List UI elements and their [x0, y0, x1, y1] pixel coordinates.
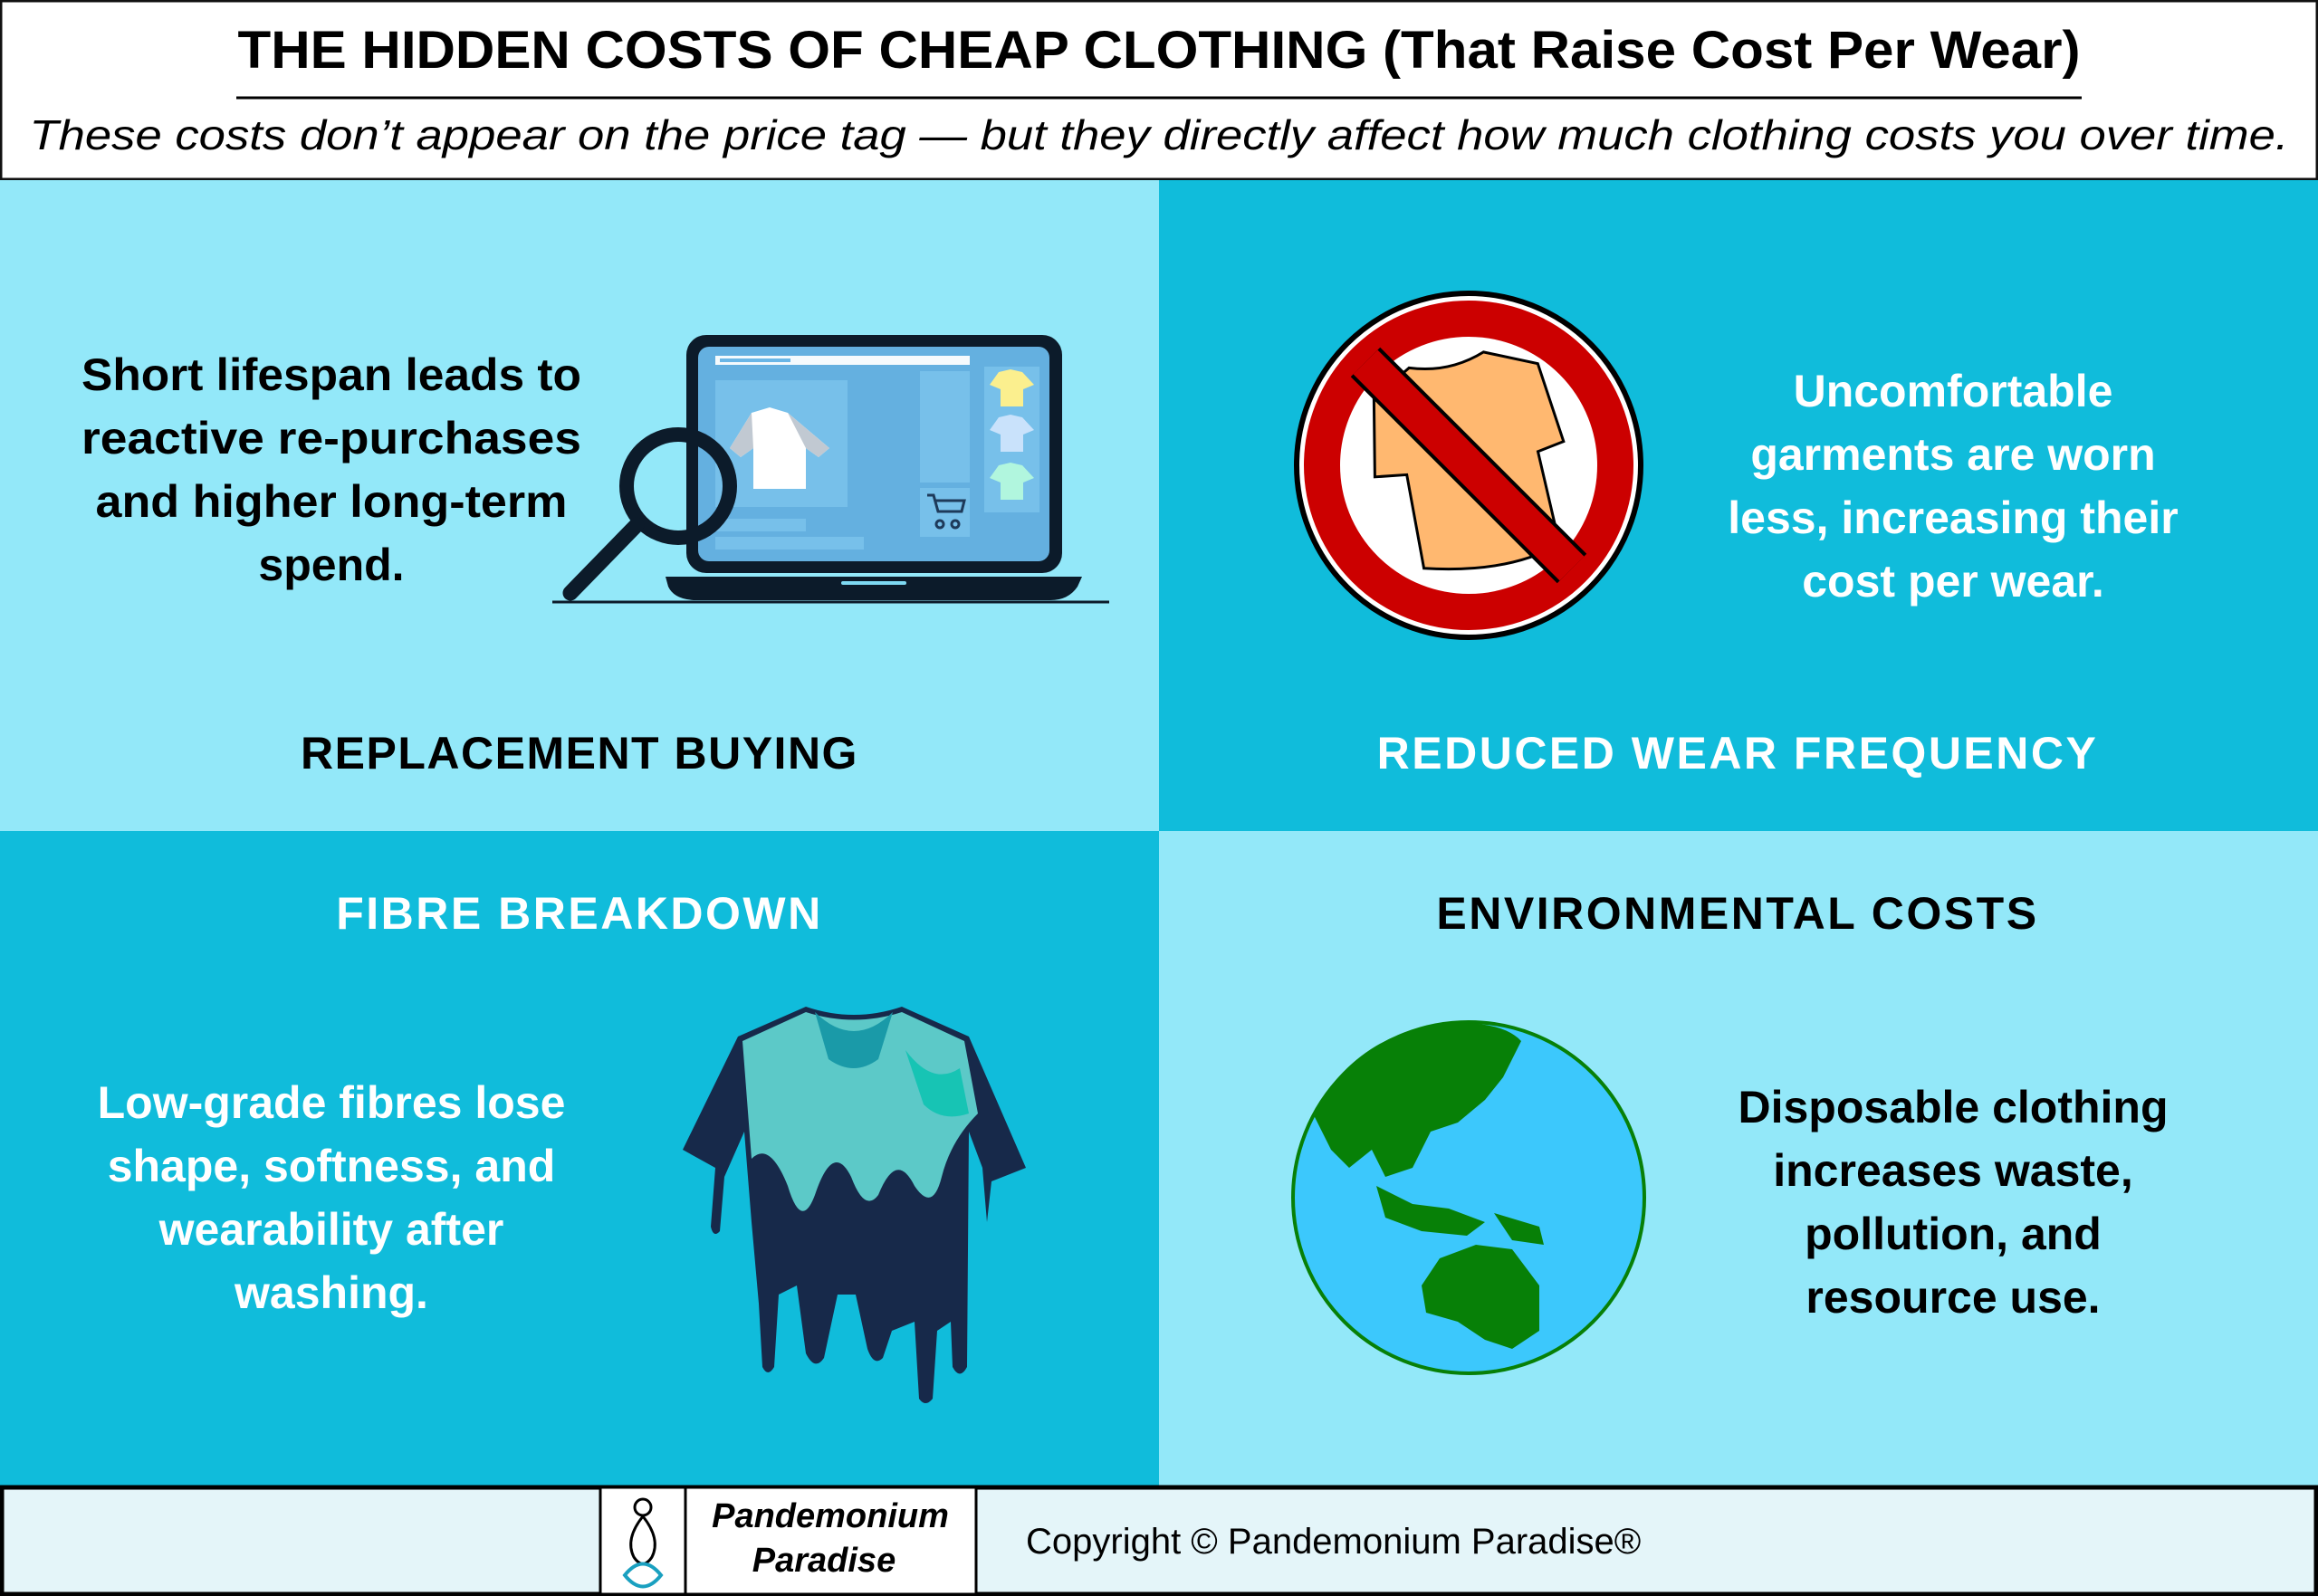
panel: environmental costs [1159, 831, 2318, 1486]
logo: Paradise [752, 1542, 896, 1580]
text: fibre breakdown: wearability after [158, 1204, 503, 1255]
text: reduced wear: garments are worn [1750, 429, 2156, 480]
text: environmental costs: resource use. [1806, 1272, 2101, 1323]
header [0, 0, 2318, 180]
text: replacement buying: reactive re-purchases [81, 413, 581, 464]
text: fibre breakdown [98, 1077, 565, 1318]
copyright: Copyright © Pandemonium Paradise® [1026, 1522, 1641, 1562]
text: replacement buying [81, 349, 581, 590]
panel: replacement buying [0, 180, 1159, 831]
panel: reduced wear frequency [1159, 180, 2318, 831]
text: replacement buying: spend. [258, 540, 405, 590]
text: fibre breakdown: shape, softness, and [108, 1141, 555, 1191]
text: reduced wear: cost per wear. [1802, 556, 2104, 607]
text: environmental costs: Disposable clothing [1738, 1082, 2169, 1132]
icon: laptop with magnifier [552, 335, 1109, 602]
icon: no-sign over t-shirt [1297, 293, 1641, 637]
text: reduced wear [1728, 366, 2179, 607]
footer [2, 1487, 2316, 1594]
text: replacement buying: and higher long-term [96, 476, 567, 527]
text: reduced wear: less, increasing their [1728, 492, 2179, 543]
title: THE HIDDEN COSTS OF CHEAP CLOTHING (That Raise Cost Per Wear) [237, 21, 2081, 80]
icon: melting shirt [683, 1007, 1026, 1403]
logo [600, 1487, 976, 1594]
text: fibre breakdown: washing. [234, 1267, 428, 1318]
text: fibre breakdown: Low-grade fibres lose [98, 1077, 565, 1128]
icon: globe [1293, 1022, 1644, 1373]
logo: Pandemonium [712, 1497, 949, 1535]
heading: reduced wear frequency: REDUCED WEAR FREQUENCY [1377, 728, 2098, 779]
text: replacement buying: Short lifespan leads to [81, 349, 581, 400]
heading: environmental costs: ENVIRONMENTAL COSTS [1436, 888, 2039, 939]
subtitle: These costs don’t appear on the price tag — but they directly affect how much clothing costs you over time. [29, 111, 2289, 158]
panel: fibre breakdown [0, 831, 1159, 1486]
heading: fibre breakdown: FIBRE BREAKDOWN [336, 888, 823, 939]
text: reduced wear: Uncomfortable [1794, 366, 2112, 416]
text: environmental costs: pollution, and [1805, 1209, 2102, 1259]
text: environmental costs: increases waste, [1773, 1145, 2133, 1196]
text: environmental costs [1738, 1082, 2169, 1323]
heading: replacement buying: REPLACEMENT BUYING [301, 728, 858, 779]
